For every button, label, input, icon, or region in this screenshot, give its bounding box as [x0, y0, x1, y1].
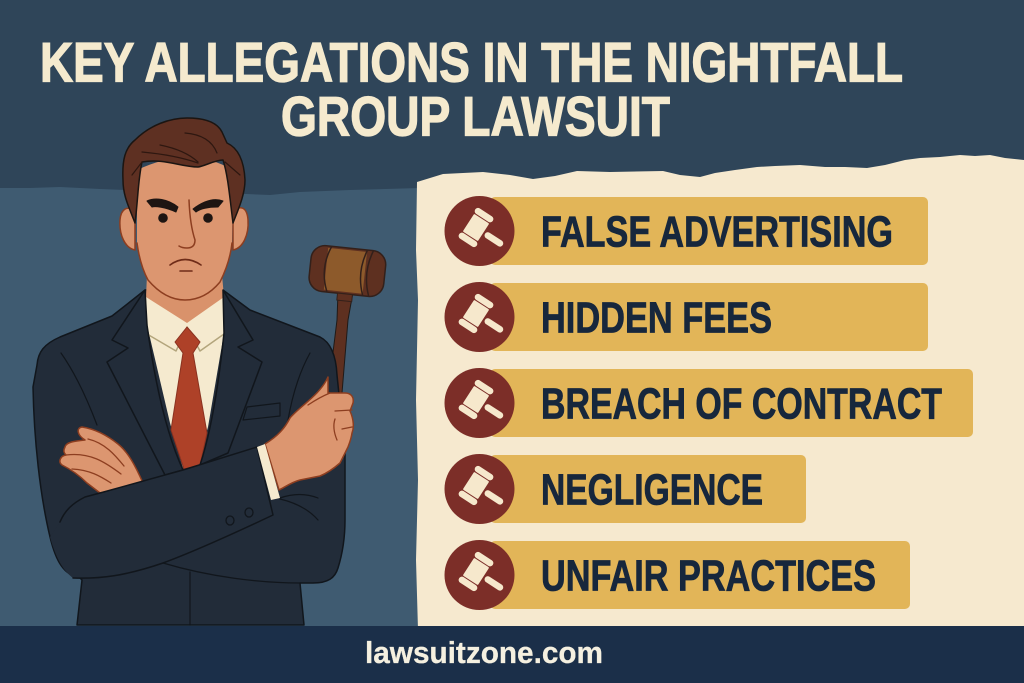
- gavel handle: [328, 292, 353, 393]
- title: [40, 30, 903, 148]
- shirt: [146, 297, 224, 468]
- hair strands: [132, 133, 240, 175]
- ears: [120, 208, 248, 250]
- sleeve wrinkles: [280, 494, 318, 520]
- panel: torn paper: [416, 155, 1024, 630]
- allegation row: false advertising: FALSE ADVERTISING: [541, 208, 893, 256]
- hair: [123, 118, 245, 223]
- crossed arm: [50, 447, 273, 578]
- hand finger lines: [308, 393, 352, 440]
- mouth: [170, 260, 201, 271]
- allegation row: breach of contract: [444, 368, 973, 438]
- collar: [147, 327, 224, 351]
- allegation row: negligence: NEGLIGENCE: [541, 466, 763, 514]
- eyes: [158, 213, 213, 223]
- tie: [171, 327, 207, 469]
- right hand holding gavel: [265, 377, 353, 490]
- left hand finger lines: [66, 439, 124, 483]
- allegation row: negligence: [444, 454, 806, 524]
- sleeve buttons: [226, 508, 253, 525]
- jacket pocket and seams: [61, 353, 310, 625]
- footer bar: lawsuitzone.com: [365, 635, 603, 670]
- nose: [179, 200, 195, 248]
- lapels: [107, 290, 262, 475]
- allegation row: unfair practices: UNFAIR PRACTICES: [541, 552, 876, 600]
- allegation row: false advertising: [444, 196, 928, 266]
- neck: [146, 275, 224, 323]
- panel: lower-left blue background: [0, 187, 420, 630]
- gavel head: [307, 244, 387, 305]
- face: [137, 158, 233, 300]
- crossed arm outline: [60, 447, 273, 578]
- jacket: [33, 290, 345, 625]
- allegation row: hidden fees: [444, 282, 928, 352]
- allegation row: unfair practices: [444, 540, 910, 610]
- allegation row: hidden fees: HIDDEN FEES: [541, 294, 772, 342]
- title: GROUP LAWSUIT: [281, 84, 670, 148]
- eyebrows: [147, 199, 223, 212]
- lower forearm line: [163, 563, 300, 583]
- jaw line: [137, 243, 232, 300]
- illustration: man with gavel: [33, 118, 387, 625]
- footer bar: [0, 626, 1024, 683]
- left hand: [60, 427, 143, 493]
- cuff: [257, 444, 280, 500]
